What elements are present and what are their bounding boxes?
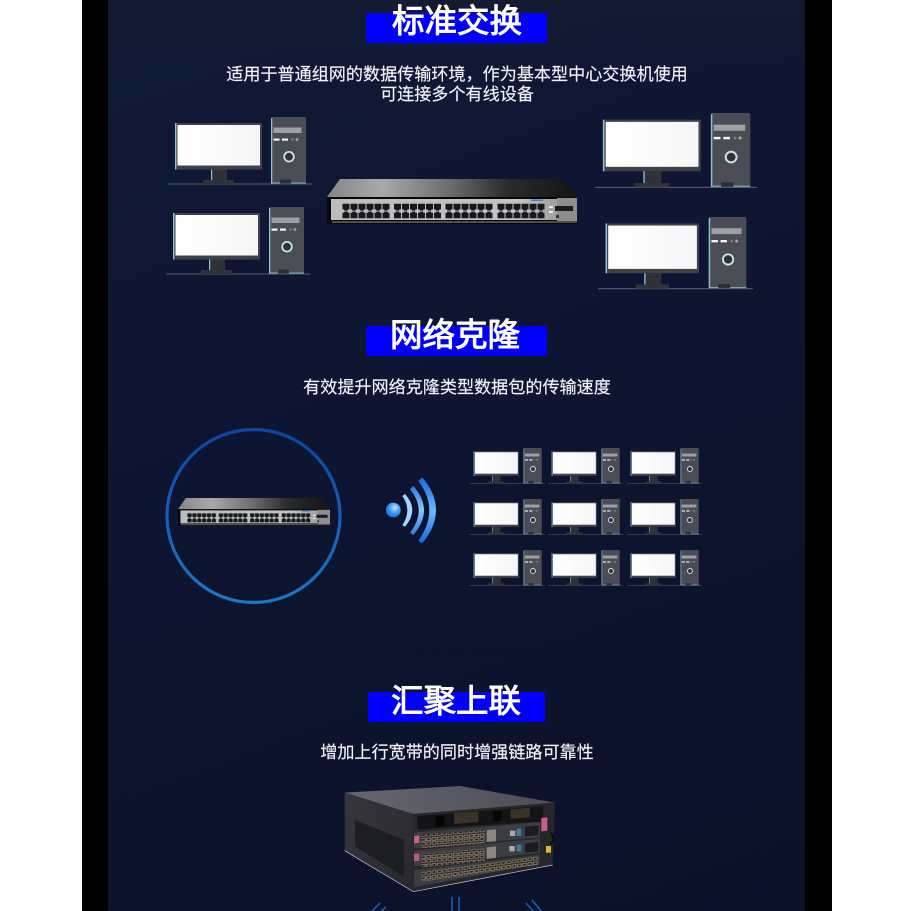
heading: network cloning: 网络克隆 [390,317,520,353]
description: network cloning: 有效提升网络克隆类型数据包的传输速度 [303,378,611,397]
section 2: ring around switch [167,430,340,602]
section 1: PC bottom-left [166,207,310,274]
heading bar: standard switching [366,13,547,43]
icon: wireless signal [386,477,436,543]
section 1: PC bottom-right [598,217,753,289]
right black band [805,0,832,911]
heading: aggregation uplink: 汇聚上联 [391,683,521,719]
section 2: switch in ring [178,498,330,526]
heading bar: aggregation uplink [368,692,545,722]
section 3: modular chassis switch [345,786,555,892]
navy background panel [108,0,805,911]
description: standard switching: 适用于普通组网的数据传输环境，作为基本型中心交换机使用 [226,65,688,84]
heading: standard switching: 标准交换 [392,3,522,39]
description: aggregation uplink: 增加上行宽带的同时增强链路可靠性 [320,743,594,762]
section 1: 48-port switch [327,179,577,224]
description: standard switching [226,65,688,104]
left black band [82,0,108,911]
description: standard switching: 可连接多个有线设备 [380,85,534,104]
section 1: PC top-left [168,117,312,184]
heading bar: network cloning [366,326,547,356]
section 2: grid of nine PCs [470,448,702,586]
section 1: PC top-right [595,113,757,188]
blue uplink lines [372,897,541,911]
